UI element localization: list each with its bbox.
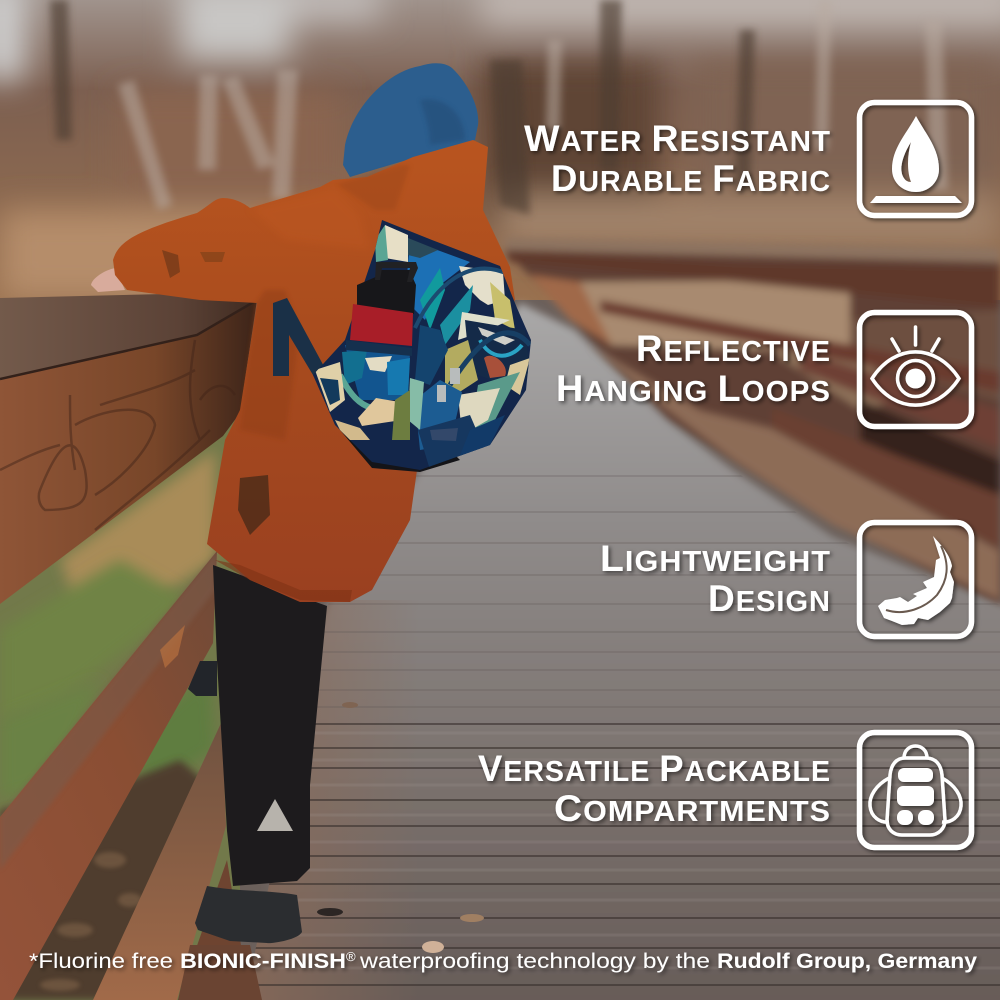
hand: [91, 268, 125, 292]
pants: [213, 565, 327, 886]
feature 1: water resistant text: WATER RESISTANT: [524, 118, 831, 159]
back foot: [188, 661, 217, 696]
jacket: [113, 140, 515, 602]
jacket shading: [162, 165, 410, 602]
feature 2: reflective text: HANGING LOOPS: [556, 368, 831, 409]
icon: feather: [860, 522, 972, 636]
feature 4: compartments text: COMPARTMENTS: [554, 788, 831, 829]
icon: eye: [860, 312, 972, 426]
feature 3: lightweight text: LIGHTWEIGHT: [600, 538, 831, 579]
boardwalk deck: [254, 300, 1000, 1000]
footnote: *Fluorine free: [29, 950, 173, 973]
fallen leaves strip: [590, 345, 1000, 600]
zipper pulls: [437, 368, 460, 402]
feature 3: lightweight text: DESIGN: [708, 578, 831, 619]
backpack: [313, 220, 531, 472]
footnote: ®: [346, 949, 356, 964]
footnote: Rudolf Group, Germany: [717, 950, 977, 973]
pack logo: [430, 428, 458, 441]
reflective triangle: [257, 799, 293, 831]
footnote: BIONIC-FINISH: [180, 950, 346, 973]
feature 4: compartments text: VERSATILE PACKABLE: [478, 748, 831, 789]
icon: backpack: [860, 732, 972, 848]
icon: water drop: [860, 102, 972, 216]
near railing: lower rail and post: [0, 551, 262, 1000]
feature 3: lightweight text: [600, 538, 831, 619]
footnote: waterproofing technology by the: [359, 950, 710, 973]
right railing: [505, 238, 1000, 610]
feature 2: reflective text: [556, 328, 831, 409]
background: blurred autumn forest: [0, 0, 1000, 300]
child: [91, 63, 531, 943]
feature 4: compartments text: [478, 748, 831, 829]
feature 1: water resistant text: [524, 118, 831, 199]
footnote: [29, 949, 977, 973]
water bottle: [346, 262, 418, 356]
grass and ground under railing: [0, 420, 240, 1000]
shoulder strap: [273, 298, 327, 380]
feature 2: reflective text: REFLECTIVE: [636, 328, 831, 369]
feature 1: water resistant text: DURABLE FABRIC: [551, 158, 831, 199]
boot: [195, 886, 302, 943]
near railing: top beam: [0, 293, 257, 604]
hat: [343, 63, 478, 177]
